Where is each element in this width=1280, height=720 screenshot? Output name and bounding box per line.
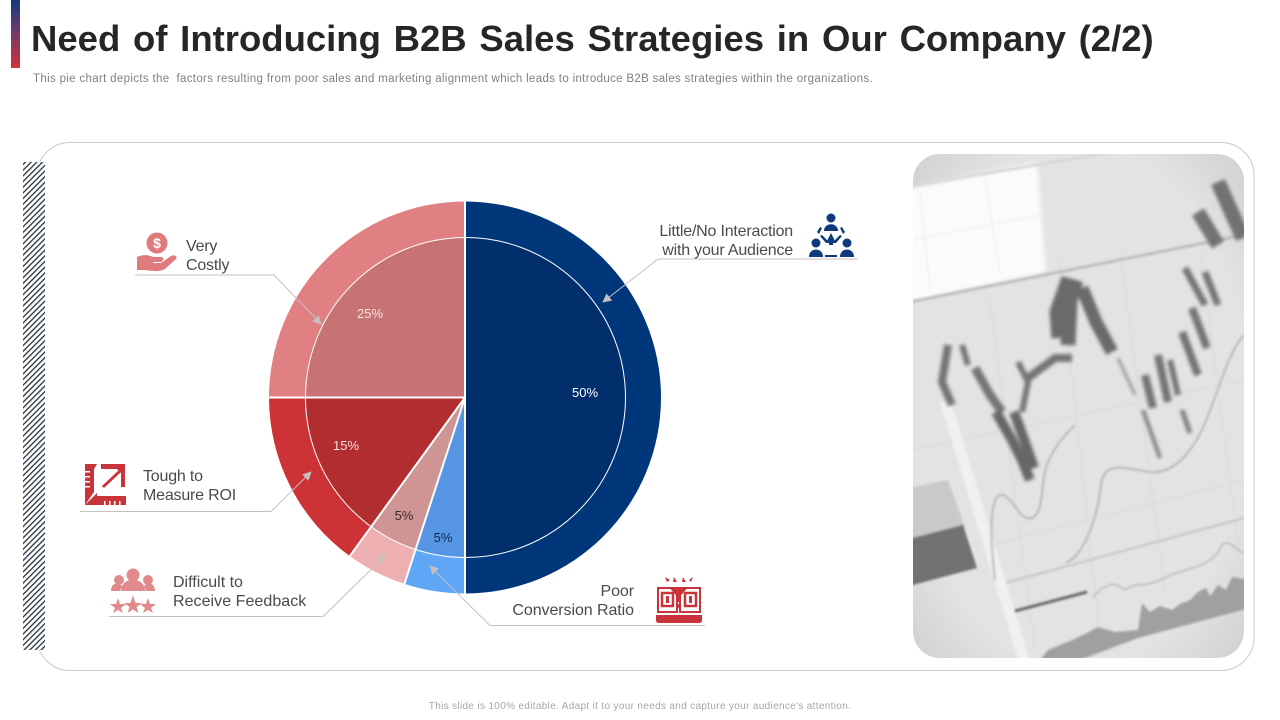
photo: smooth curve (992, 335, 1244, 580)
label: conversion: Poor (600, 583, 635, 600)
photo: bright paper patch (905, 162, 1046, 303)
label: feedback: Difficult to (173, 574, 243, 591)
label: conversion: Conversion Ratio (512, 602, 634, 619)
label: very costly: Costly (186, 257, 229, 274)
label: ROI: Measure ROI (143, 487, 236, 504)
value 15%: 15% (333, 438, 359, 453)
label: very costly: Very (186, 238, 217, 255)
stock chart photo (905, 130, 1250, 660)
photo: horizontal rules (916, 154, 1103, 186)
slice: 50% interaction (465, 202, 661, 594)
label: very costly (186, 238, 229, 274)
title accent bar (11, 0, 20, 68)
icon: hand with coin (137, 232, 177, 271)
photo: grid lines (913, 250, 1244, 650)
icon: ruler measure (85, 464, 126, 505)
label: feedback: Receive Feedback (173, 593, 307, 610)
label: ROI (143, 468, 236, 504)
callout arrow: conversion (430, 566, 705, 626)
photo: candlestick clusters (942, 182, 1243, 480)
slice: 25% costly (269, 202, 465, 398)
icon: hand with coin: $ (153, 235, 161, 251)
callout arrow: feedback (109, 556, 385, 616)
callout arrow: interaction (603, 259, 858, 302)
icon: audience network (809, 214, 854, 257)
value 25%: 25% (357, 306, 383, 321)
title: Need of Introducing B2B Sales Strategies in Our Company (2/2) (31, 18, 1154, 59)
subtitle: This pie chart depicts the factors resulting from poor sales and marketing alignment which leads to introduce B2B sales strategies within the organizations. (33, 73, 873, 85)
label: ROI: Tough to (143, 468, 203, 485)
icon: laptop funnel (656, 577, 702, 623)
value 5% feedback: 5% (395, 508, 414, 523)
photo: pale vertical band (945, 400, 1024, 660)
label: feedback (173, 574, 307, 610)
photo: side blocks (913, 480, 965, 538)
callout arrow: ROI (80, 472, 311, 512)
pie chart (268, 200, 661, 595)
label: interaction: with your Audience (661, 242, 793, 259)
value 50%: 50% (572, 385, 598, 400)
footer note: This slide is 100% editable. Adapt it to your needs and capture your audience's attention. (429, 701, 851, 712)
hatched strip (23, 162, 45, 650)
slice: 5% feedback (350, 398, 465, 584)
photo: volume area (1040, 577, 1250, 660)
icon: people and stars (110, 568, 156, 613)
main diagram (23, 142, 1254, 671)
label: interaction: Little/No Interaction (659, 223, 793, 240)
content frame (37, 142, 1254, 670)
label: interaction (659, 223, 793, 259)
photo: paper grid (913, 175, 1040, 290)
inner ring (306, 238, 626, 558)
photo: lower line (1092, 543, 1244, 598)
value 5% conversion: 5% (434, 530, 453, 545)
label: conversion (512, 583, 635, 619)
callout arrow: costly (135, 275, 321, 324)
photo: blurred caption (1015, 592, 1087, 611)
slice: 15% ROI (269, 398, 465, 556)
slice separators (268, 200, 465, 595)
slice: 5% conversion (404, 398, 465, 594)
